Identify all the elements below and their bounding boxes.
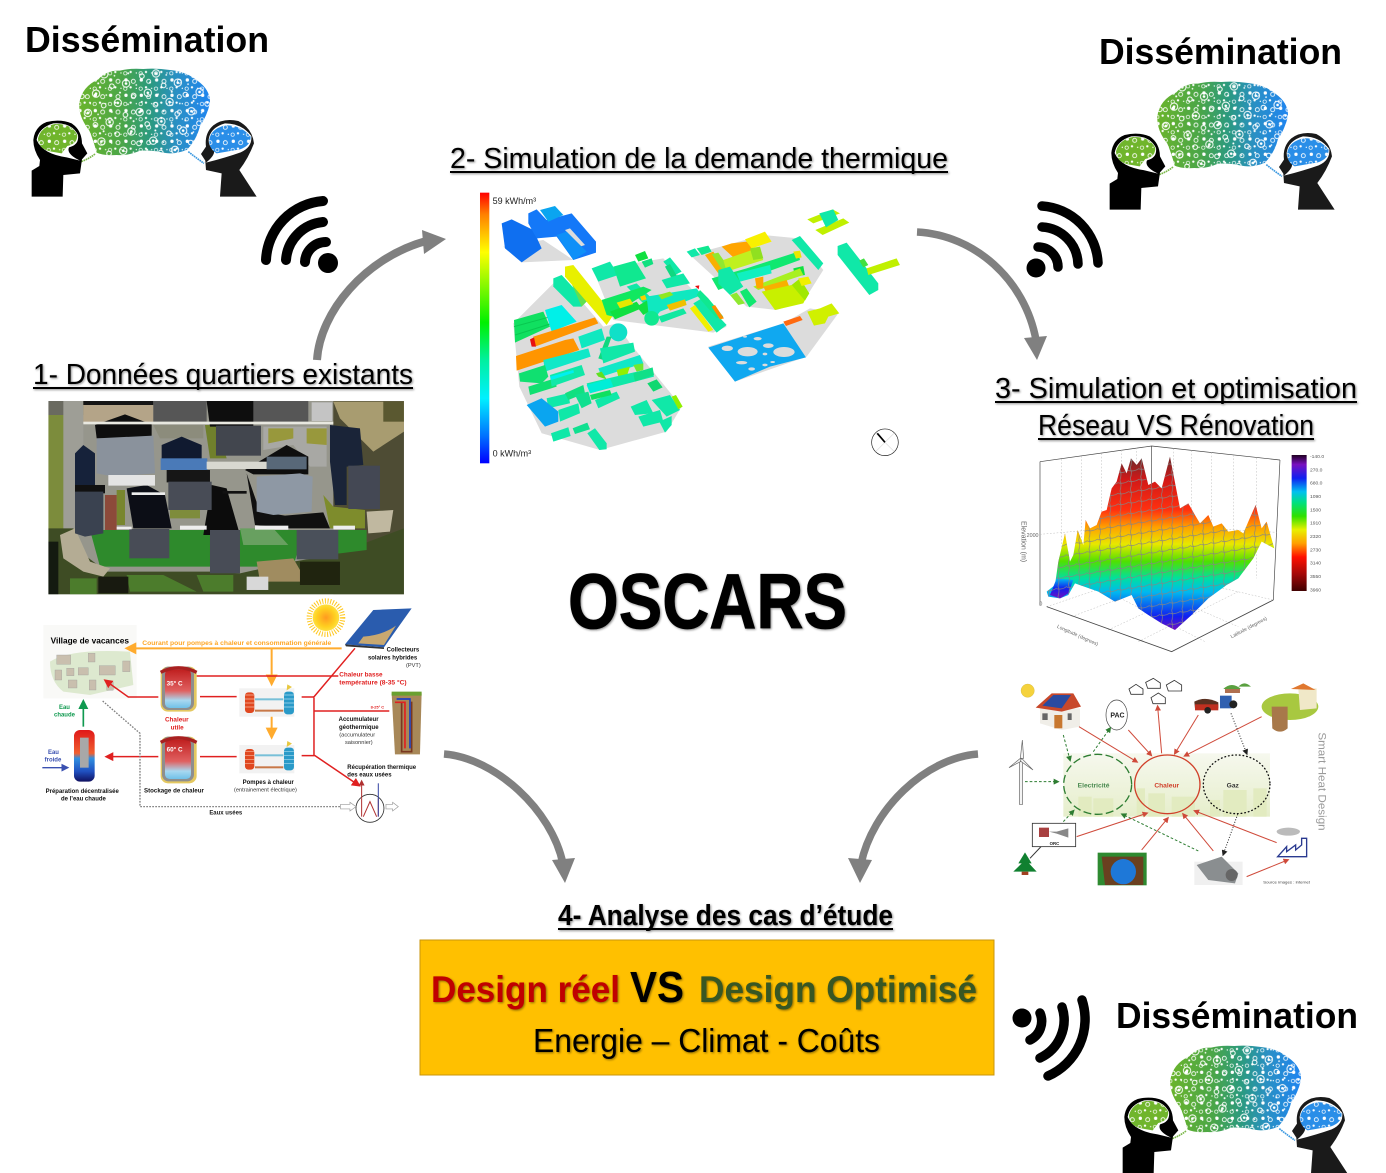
colour scale	[480, 193, 536, 463]
storage tanks	[161, 667, 197, 783]
colour scale: 1090	[1310, 494, 1321, 500]
heading: step 1: 1- Données quartiers existants	[33, 359, 413, 391]
green and dotted connections	[1025, 713, 1247, 854]
lower-left buildings	[514, 265, 683, 450]
colour scale: 270.0	[1310, 467, 1323, 473]
heading: step 3: Réseau VS Rénovation	[1038, 410, 1314, 442]
storage tanks: 60° C	[167, 746, 183, 754]
panel: case study comparison	[420, 940, 994, 1075]
photo: aerial view of district	[48, 401, 404, 594]
sun	[1021, 684, 1034, 697]
sun	[309, 601, 343, 634]
arrow: optimisation to analysis	[848, 754, 978, 883]
storage tank	[1098, 853, 1147, 885]
arrow: simulation to optimisation	[917, 232, 1047, 360]
hot water tank	[42, 702, 204, 803]
hot water tank: Eau	[59, 705, 70, 711]
energy loops: Electricité	[1078, 782, 1110, 789]
axis labels: 2000	[1027, 533, 1039, 539]
ORC box and tree: ORC	[1050, 841, 1059, 846]
design optimised text: Design Optimisé	[699, 969, 977, 1010]
heat labels: 8-25° C	[371, 704, 384, 709]
icon: signal bottom	[1012, 1000, 1085, 1076]
heading: step 3	[995, 373, 1357, 442]
colour scale: 1910	[1310, 521, 1321, 527]
heat recovery	[341, 765, 417, 822]
geothermal store	[339, 692, 422, 754]
heat pumps: (entrainement électrique)	[234, 788, 297, 794]
icon: signal top left	[266, 201, 338, 273]
colour scale: -140.0	[1310, 454, 1324, 460]
hot water tank: Stockage de chaleur	[144, 788, 204, 795]
solar collector: solaires hybrides	[368, 655, 418, 661]
title: Dissémination top right: Dissémination	[1099, 31, 1342, 72]
PAC	[1106, 700, 1127, 730]
criteria text: Energie – Climat - Coûts	[533, 1022, 880, 1059]
blue slab	[708, 323, 806, 382]
energy loops	[1064, 754, 1270, 814]
waste water path	[103, 701, 340, 816]
colour scale: 1500	[1310, 507, 1321, 513]
storage tanks: 35° C	[167, 680, 183, 688]
heat lines	[106, 648, 389, 785]
city band	[1063, 753, 1270, 817]
surface mesh	[1047, 457, 1274, 630]
hot water tank: de l’eau chaude	[61, 797, 107, 803]
ORC box and tree	[1013, 823, 1076, 875]
axis labels: Latitude (degrees)	[1230, 616, 1269, 640]
icon: talking heads top right	[1110, 82, 1335, 210]
title: Dissémination bottom right: Dissémination	[1116, 995, 1358, 1036]
middle block buildings	[592, 251, 727, 333]
colour scale: 59 kWh/m³	[493, 196, 536, 206]
heading: step 2: 2- Simulation de la demande thermique	[450, 143, 948, 175]
colour scale	[1292, 454, 1324, 593]
axes and grid	[1040, 446, 1280, 652]
geothermal store: géothermique	[339, 725, 379, 731]
axis labels: Elevation (m)	[1020, 521, 1027, 562]
heat recovery: Récupération thermique	[347, 765, 417, 771]
heat labels: Chaleur	[165, 717, 189, 724]
title: OSCARS: OSCARS	[568, 557, 847, 645]
roofs	[97, 436, 155, 477]
solar house	[1036, 693, 1081, 730]
icon: talking heads bottom right	[1123, 1046, 1348, 1173]
wind turbine	[1009, 740, 1033, 804]
red connections	[1077, 707, 1288, 877]
heat labels	[165, 672, 407, 731]
compass	[872, 429, 898, 456]
colour scale: 680.0	[1310, 481, 1323, 487]
waste water path: Eaux usées	[209, 810, 243, 816]
surface	[1047, 457, 1274, 630]
axis labels: Longitude (degrees)	[1056, 624, 1099, 648]
colour scale: 3140	[1310, 561, 1321, 567]
shadows	[207, 401, 253, 427]
hot water tank: froide	[45, 758, 62, 764]
heat recovery: des eaux usées	[347, 773, 392, 779]
low valley colouring	[1050, 578, 1073, 598]
heat labels: utile	[171, 724, 184, 731]
icon: talking heads top left	[32, 69, 257, 197]
image source: Source images : internet	[1263, 880, 1310, 884]
electricity lines: Courant pour pompes à chaleur et consommation générale	[142, 640, 332, 647]
heat pumps	[234, 684, 297, 794]
chart: district thermal demand 3D map	[480, 193, 900, 463]
hot water tank: Préparation décentralisée	[46, 789, 120, 795]
colour scale: 2320	[1310, 534, 1321, 540]
hot water tank: Eau	[48, 750, 59, 756]
heading: step 4: 4- Analyse des cas d’étude	[558, 900, 893, 932]
heat labels: température (8-35 °C)	[339, 678, 407, 686]
colour scale: 2730	[1310, 547, 1321, 553]
far right buildings	[783, 209, 900, 326]
geothermal store: Accumulateur	[339, 717, 379, 723]
PAC: PAC	[1110, 713, 1125, 720]
colour scale: 3960	[1310, 587, 1321, 593]
colour scale: 3550	[1310, 574, 1321, 580]
arrow: data to analysis	[444, 754, 575, 883]
village plan	[43, 625, 137, 698]
small houses	[1129, 678, 1182, 704]
heat pumps: Pompes à chaleur	[243, 780, 295, 786]
geothermal well and building	[1262, 683, 1318, 732]
VS text: VS	[630, 963, 684, 1012]
diagram: heating system schematic	[42, 601, 422, 822]
heading: step 3: 3- Simulation et optimisation	[995, 373, 1357, 405]
geothermal store: saisonnier)	[345, 740, 373, 746]
axis labels: 0	[1039, 602, 1042, 608]
colour scale: 0 kWh/m³	[493, 449, 531, 459]
ground areas	[503, 235, 838, 450]
village plan: Village de vacances	[51, 637, 130, 646]
right block buildings	[687, 232, 823, 310]
geothermal store: (accumulateur	[339, 732, 375, 738]
tractor and biogas	[1194, 683, 1251, 714]
heat labels: Chaleur basse	[339, 672, 383, 679]
arrow: data to simulation	[317, 230, 446, 360]
chart: 3D elevation surface	[1020, 446, 1324, 652]
diagram: smart heat design	[1009, 678, 1327, 885]
solar collector	[345, 608, 421, 669]
blue buildings	[502, 206, 596, 262]
factory	[1277, 828, 1307, 857]
icon: signal top right	[1026, 206, 1098, 278]
vertical label: Smart Heat Design	[1315, 732, 1327, 831]
title: Dissémination top left: Dissémination	[25, 19, 269, 60]
engine	[1194, 857, 1243, 885]
energy loops: Chaleur	[1154, 782, 1180, 789]
axis labels	[1020, 521, 1269, 648]
energy loops: Gaz	[1227, 782, 1240, 789]
solar collector: (PVT)	[406, 663, 421, 669]
hot water tank: chaude	[54, 713, 76, 719]
design real text: Design réel	[431, 969, 620, 1010]
solar collector: Collecteurs	[387, 648, 420, 654]
